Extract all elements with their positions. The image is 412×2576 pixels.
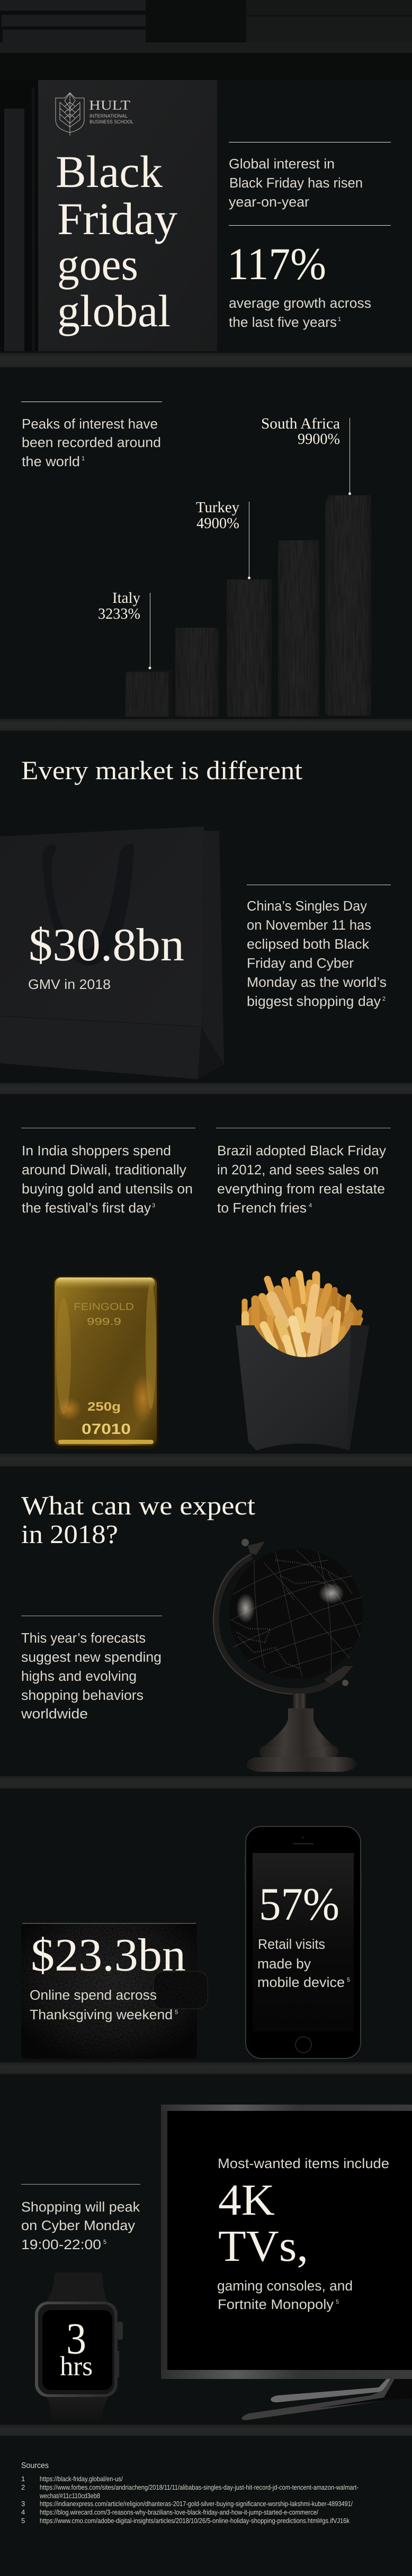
stat: $23.3bn: Thanksgiving weekend <box>30 2007 173 2022</box>
text block: India: In India shoppers spend <box>22 1143 171 1158</box>
text block: global interest <box>229 142 391 226</box>
text block: most-wanted items: 5 <box>336 2299 339 2305</box>
text block: China's Singles Day: China’s Singles Day <box>247 898 367 914</box>
text block: sources: 1 <box>21 2475 25 2483</box>
illustration: smartwatch <box>35 2272 123 2421</box>
text block: peaks of interest: Peaks of interest have <box>22 416 158 432</box>
stat: $30.8bn GMV: $30.8bn <box>29 920 184 971</box>
bar chart: peaks by country <box>98 415 371 717</box>
bar: unlabelled 2 <box>175 628 219 717</box>
stat: 117% growth: 1 <box>338 316 341 323</box>
stat: $23.3bn: 5 <box>175 2009 178 2016</box>
text block: global interest: Global interest in <box>229 156 335 172</box>
text block: China's Singles Day: 2 <box>382 996 386 1002</box>
stat: 117% growth <box>227 238 371 330</box>
illustration: wallet <box>21 1923 208 2059</box>
text block: Brazil: 4 <box>309 1202 312 1209</box>
text block: sources: 5 <box>21 2517 25 2525</box>
text block: India <box>21 1128 195 1216</box>
shelf <box>0 1776 412 1789</box>
logo: Hult International Business School: HULT <box>89 97 130 113</box>
bar: Italy <box>126 670 172 717</box>
label: Turkey: 4900% <box>196 515 239 532</box>
text block: sources: 4 <box>21 2508 25 2516</box>
text block: most-wanted items <box>217 2155 389 2312</box>
bar: South Africa <box>325 495 371 716</box>
text block: most-wanted items: Fortnite Monopoly <box>218 2296 334 2312</box>
heading: what can we expect in 2018: What can we expect <box>21 1491 255 1520</box>
text block: Brazil: Brazil adopted Black Friday <box>217 1143 386 1158</box>
stat: 57% retail visits <box>257 1879 350 1990</box>
label: Italy: 3233% <box>98 605 140 622</box>
stat: 3 hrs: hrs <box>60 2351 93 2382</box>
globe sphere <box>229 1548 363 1679</box>
illustration: gold bar: 07010 <box>82 1421 131 1437</box>
stat: $30.8bn GMV: GMV in 2018 <box>28 976 111 992</box>
text block: Brazil: in 2012, and sees sales on <box>217 1162 379 1178</box>
panel: hero books <box>0 80 217 351</box>
text block: most-wanted items: 4K <box>218 2176 275 2225</box>
stat: $23.3bn: Online spend across <box>30 1987 157 2003</box>
title: Friday <box>57 193 177 244</box>
text block: forecasts: worldwide <box>21 1706 88 1722</box>
bag handle <box>42 843 134 966</box>
shelf <box>0 2425 412 2436</box>
stat: 57% retail visits: 5 <box>347 1977 350 1983</box>
text block: China's Singles Day: biggest shopping day <box>247 993 381 1009</box>
text block: India: the festival’s first day <box>22 1200 151 1216</box>
text block: global interest: year-on-year <box>229 194 309 210</box>
text block: sources: https://www.cmo.com/adobe-digital-insights/articles/2018/10/26/5-online-holiday-shopping-predictions.html#gs.ifVJ16k <box>40 2517 350 2525</box>
panel: top bookshelf <box>0 0 412 80</box>
stat: 117% growth: the last five years <box>229 314 337 330</box>
text block: India: around Diwali, traditionally <box>22 1162 186 1178</box>
text block: peaks of interest: been recorded around <box>22 434 161 450</box>
text block: Brazil: to French fries <box>217 1200 307 1216</box>
title: global <box>57 286 171 336</box>
text block: sources: 2 <box>21 2483 25 2491</box>
illustration: phone <box>245 1826 362 2058</box>
text block: peaks of interest <box>21 402 162 469</box>
text block: forecasts: shopping behaviors <box>21 1687 144 1703</box>
text block: global interest: Black Friday has risen <box>229 175 363 191</box>
label: South Africa: South Africa <box>261 415 340 432</box>
heading: what can we expect in 2018: in 2018? <box>21 1519 118 1549</box>
book cover <box>38 80 217 351</box>
illustration: television <box>161 2105 412 2420</box>
text block: most-wanted items: Most-wanted items include <box>218 2155 389 2171</box>
stat: 117% growth: 117% <box>227 238 326 289</box>
text block: China's Singles Day: Monday as the world’s <box>247 974 387 990</box>
text block: sources: https://www.forbes.com/sites/andriacheng/2018/11/11/alibabas-singles-day-just-hit-record-jd-com-tencent-amazon-walmart- <box>40 2483 359 2491</box>
text block: most-wanted items: gaming consoles, and <box>217 2278 353 2294</box>
label: Italy: Italy <box>112 590 140 607</box>
logo: Hult International Business School <box>56 93 133 136</box>
shelf <box>0 1083 412 1094</box>
text block: India: buying gold and utensils on <box>22 1181 193 1197</box>
text block: forecasts: highs and evolving <box>21 1668 137 1684</box>
text block: sources: wechat/#11c110cd3eb8 <box>39 2492 100 2500</box>
text block: cyber monday peak: on Cyber Monday <box>21 2217 135 2233</box>
bar: Turkey <box>227 580 272 717</box>
label: South Africa <box>261 415 351 495</box>
illustration: shopping bag <box>0 826 224 1079</box>
text block: cyber monday peak: Shopping will peak <box>21 2199 140 2215</box>
title <box>56 146 177 336</box>
stat: 117% growth: average growth across <box>229 295 371 311</box>
heading: every market is different: Every market is different <box>21 755 302 785</box>
text block: sources: https://blog.wirecard.com/3-reasons-why-brazilians-love-black-friday-and-how-it-jump-started-e-commerce/ <box>40 2508 318 2516</box>
text block: forecasts: This year’s forecasts <box>21 1630 146 1646</box>
stat: 57% retail visits: Retail visits <box>258 1936 325 1952</box>
text block: China's Singles Day: eclipsed both Black <box>247 936 370 952</box>
shelf <box>0 2062 412 2074</box>
text block: China's Singles Day: Friday and Cyber <box>247 955 354 971</box>
icon: wheat shield <box>56 93 84 136</box>
shelf <box>0 1454 412 1467</box>
illustration: gold bar: FEINGOLD <box>74 1302 134 1313</box>
text block: forecasts: suggest new spending <box>21 1649 162 1665</box>
text block: sources: https://indianexpress.com/article/religion/dhanteras-2017-gold-silver-buying-significance-worship-lakshmi-kuber-4893491/ <box>40 2500 353 2508</box>
title: goes <box>57 239 138 290</box>
text block: peaks of interest: 1 <box>82 456 85 462</box>
stat: 3 hrs: 3 <box>66 2314 86 2364</box>
label: South Africa: 9900% <box>298 431 340 448</box>
text block: cyber monday peak <box>21 2184 140 2252</box>
heading: what can we expect in 2018 <box>21 1491 255 1549</box>
text block: sources <box>21 2461 359 2525</box>
label: Turkey: Turkey <box>196 499 239 516</box>
stat: 3 hrs <box>60 2314 93 2382</box>
stat: $23.3bn <box>30 1930 186 2022</box>
illustration: globe <box>213 1539 363 1772</box>
illustration: french fries in black box <box>236 1274 369 1450</box>
text block: peaks of interest: the world <box>22 453 80 469</box>
logo: Hult International Business School: BUSINESS SCHOOL <box>89 119 133 125</box>
fries <box>243 1274 363 1357</box>
label: Turkey <box>196 499 250 580</box>
text block: sources: 3 <box>21 2500 25 2508</box>
title: Black <box>56 146 163 197</box>
text block: Brazil <box>216 1128 391 1216</box>
text block: sources: https://black-friday.global/en-us/ <box>40 2475 123 2483</box>
illustration: gold bar: 250g <box>87 1400 121 1413</box>
text block: most-wanted items: TVs, <box>218 2222 308 2271</box>
text block: forecasts <box>21 1616 162 1722</box>
stat: 57% retail visits: 57% <box>259 1879 339 1930</box>
stat: $23.3bn: $23.3bn <box>31 1930 186 1981</box>
text block: China's Singles Day <box>247 885 391 1009</box>
wallet clasp <box>154 1972 208 2009</box>
bar: unlabelled 4 <box>278 540 319 716</box>
stat: $30.8bn GMV <box>28 920 184 992</box>
shelf <box>0 353 412 368</box>
illustration: gold bar <box>52 1276 159 1449</box>
fries box <box>236 1325 369 1450</box>
text block: India: 3 <box>152 1202 155 1209</box>
stat: 57% retail visits: mobile device <box>257 1974 345 1990</box>
text block: sources: Sources <box>21 2461 49 2470</box>
illustration: gold bar: 999.9 <box>87 1316 121 1327</box>
text block: China's Singles Day: on November 11 has <box>247 917 371 933</box>
stat: 57% retail visits: made by <box>257 1956 311 1972</box>
globe stand <box>247 1693 356 1772</box>
tv stand <box>241 2379 412 2420</box>
text block: Brazil: everything from real estate <box>217 1181 385 1197</box>
globe arm <box>216 1556 333 1691</box>
text block: cyber monday peak: 19:00-22:00 <box>21 2236 101 2252</box>
text block: cyber monday peak: 5 <box>103 2239 106 2245</box>
logo: Hult International Business School: INTERNATIONAL <box>89 113 128 119</box>
label: Italy <box>98 590 151 670</box>
shelf <box>0 719 412 731</box>
